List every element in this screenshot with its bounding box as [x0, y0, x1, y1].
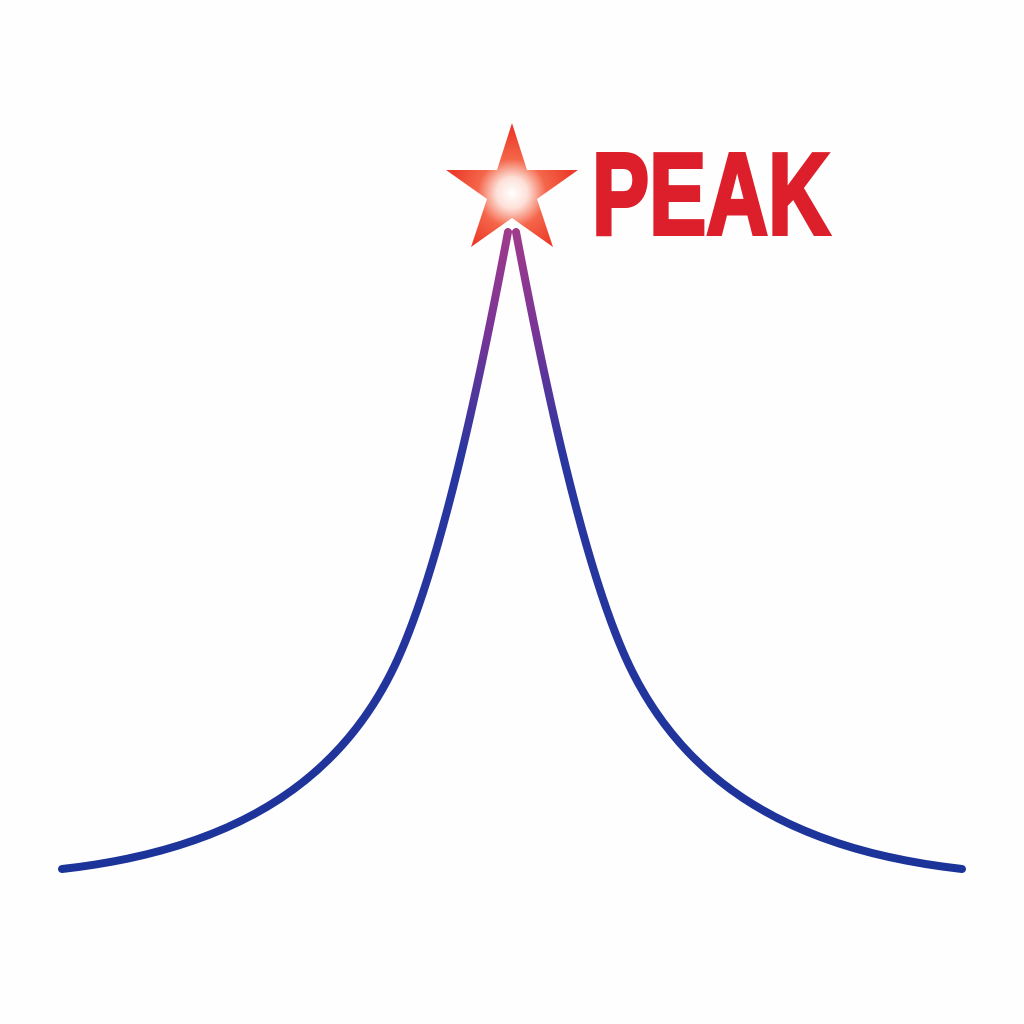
peak curve — [62, 232, 962, 869]
label: PEAK: PEAK — [592, 129, 830, 259]
icon: star — [446, 123, 578, 247]
